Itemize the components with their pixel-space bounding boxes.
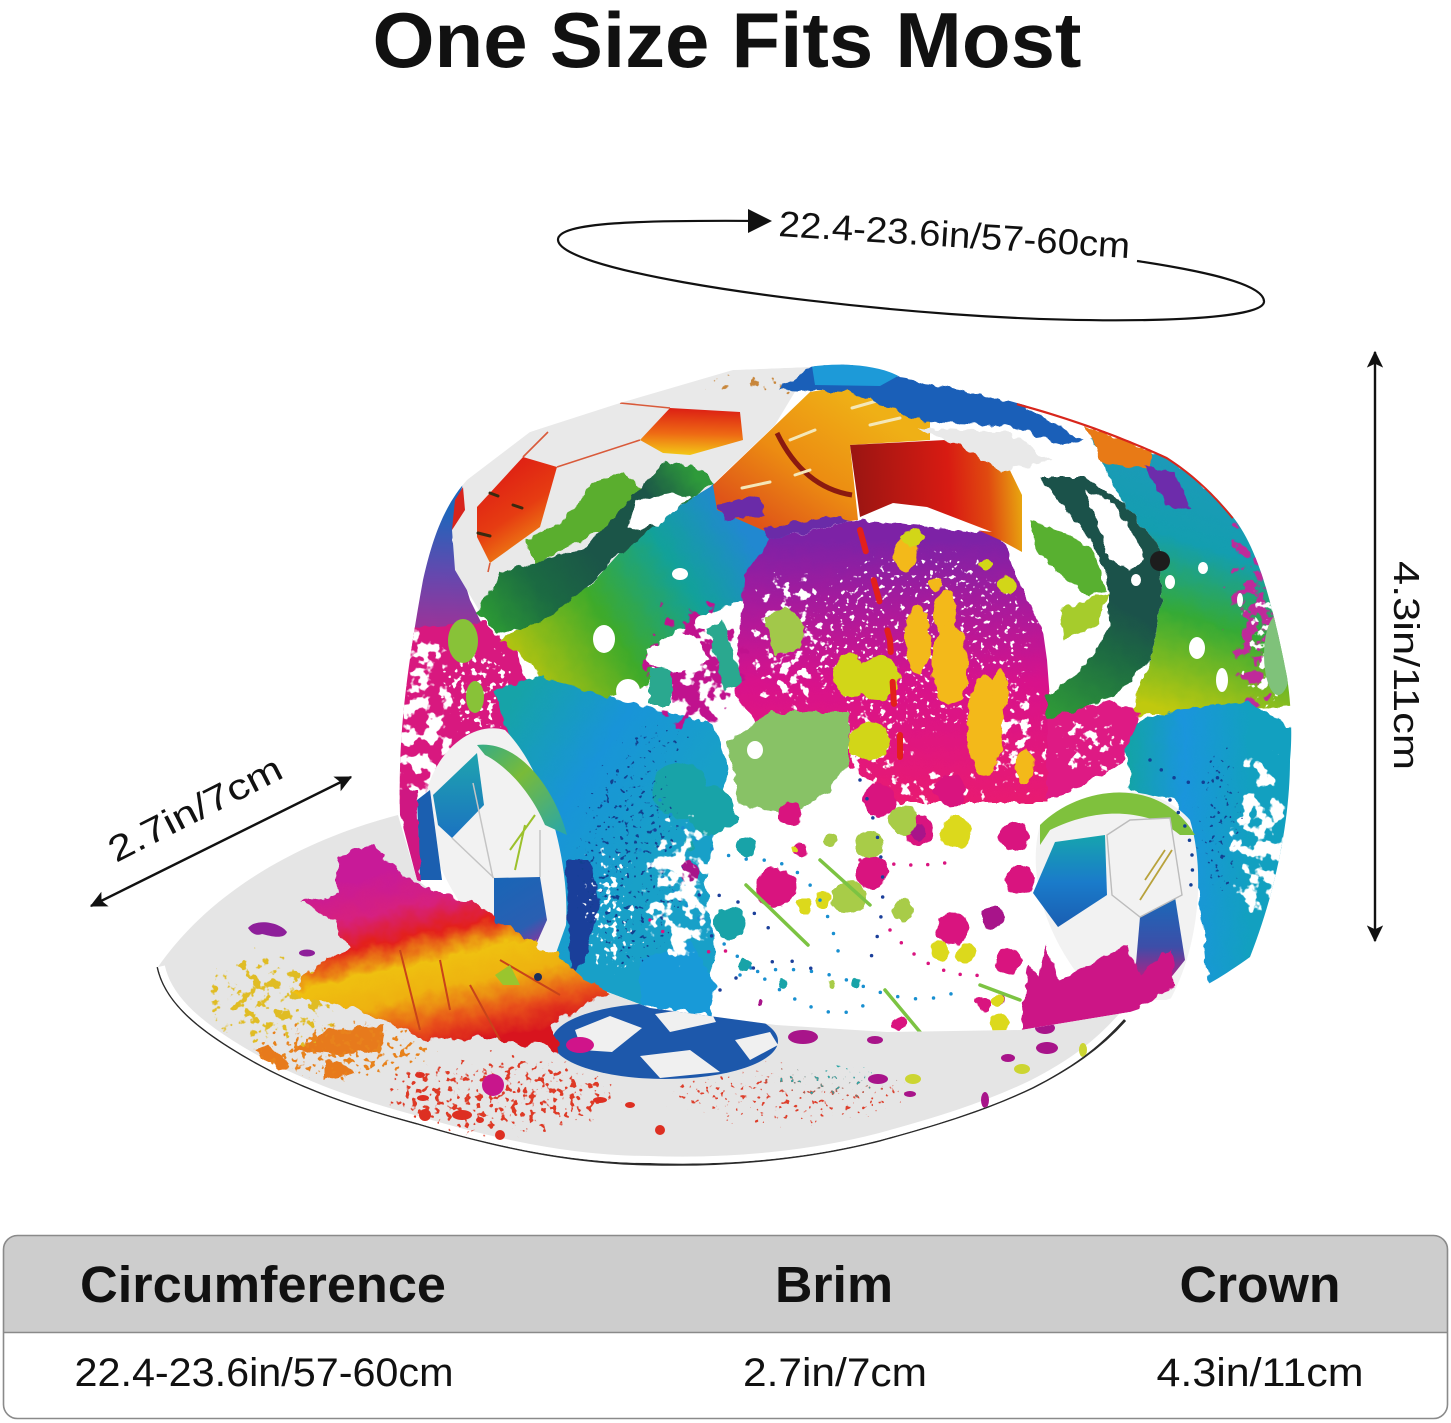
table value row: 4.3in/11cm	[1156, 1351, 1364, 1395]
magenta splash on the right ball	[1021, 945, 1175, 1030]
dark green swoosh	[477, 460, 713, 633]
brim orange spray	[250, 1015, 440, 1085]
crown of the hat with paint splatter	[384, 350, 1300, 1050]
blue patch at the bottom centre	[640, 940, 715, 1015]
navy and white speckle on the left blue	[568, 745, 692, 975]
blue band across the top	[780, 365, 1085, 445]
lower centre splatter blobs: purple	[677, 823, 1006, 1006]
lime blob in the speckled area	[765, 605, 805, 655]
circumference measurement: ellipse arrow and label: 22.4-23.6in/57-60cm	[777, 203, 1131, 266]
top edge streaks	[705, 374, 790, 394]
yellow spray	[200, 950, 350, 1050]
dark green crescent	[1040, 477, 1163, 717]
brim length measurement: arrow and label: 2.7in/7cm	[101, 747, 289, 870]
orange patch at top right	[1085, 425, 1150, 470]
right soccer ball	[1033, 792, 1198, 1000]
streaks on the orange panel	[742, 400, 900, 488]
magenta strip at the crown's left base	[399, 790, 420, 882]
table value row: 22.4-23.6in/57-60cm	[74, 1351, 453, 1395]
orange patches	[253, 1025, 385, 1080]
upper left soccer ball	[452, 367, 810, 612]
white paint splat near the green	[647, 632, 708, 672]
lower centre splatter blobs: yellow	[791, 817, 1010, 1035]
blue lower left splash	[495, 676, 728, 1005]
purple ring splat	[248, 922, 287, 937]
purple and green flecks under the orange	[718, 495, 850, 540]
left side panel: blue to purple	[411, 486, 481, 650]
hat illustration	[150, 350, 1300, 1180]
lower right blue splash	[1125, 702, 1295, 995]
lower centre splatter blobs: lime	[824, 805, 918, 989]
circumference measurement: ellipse arrow and label	[558, 203, 1264, 320]
table header row	[4, 1236, 1448, 1332]
rainbow field right of the crescent	[1090, 440, 1295, 716]
left side magenta field	[392, 622, 530, 815]
central green to blue splash	[500, 482, 790, 715]
lower centre splatter blobs: magenta	[756, 774, 1035, 1030]
dark red curve	[777, 433, 852, 495]
table value row: 2.7in/7cm	[743, 1351, 927, 1395]
table header row: Circumference	[80, 1256, 446, 1313]
lime streaks	[746, 860, 1020, 1050]
green splash on the ball	[525, 470, 640, 565]
right edge speckle	[1230, 490, 1294, 720]
table header row: Brim	[775, 1256, 893, 1313]
red arc panel	[850, 440, 1022, 552]
green paint blobs on the left	[448, 619, 478, 663]
right white panel with green splat	[1043, 633, 1052, 692]
table header row: Crown	[1180, 1256, 1340, 1313]
brim rainbow splash	[290, 845, 610, 1050]
white splat on the crescent	[1085, 490, 1145, 570]
yellow-lime blobs in magenta	[833, 531, 1016, 762]
hat eyelet	[1150, 551, 1170, 571]
lower centre splatter blobs: teal	[652, 762, 861, 988]
red drips in magenta	[860, 530, 900, 775]
small flecks to the right	[650, 1057, 930, 1133]
table value row	[74, 1351, 1364, 1395]
orange panel at the top centre	[713, 385, 930, 532]
yellow-orange paint dribbles	[893, 538, 1033, 783]
red line along the top right seam	[1017, 404, 1233, 518]
crown height measurement: arrow and label: 4.3in/11cm	[1386, 561, 1427, 770]
white paint spots on the colour	[593, 562, 1243, 759]
sage green blob	[727, 712, 850, 815]
speckled magenta left of the centre	[640, 603, 750, 733]
dark navy splatter beside the left ball	[566, 860, 600, 975]
red spray	[375, 1053, 625, 1137]
brim of the hat	[150, 800, 1150, 1180]
red flecks	[415, 1072, 665, 1140]
magenta and purple dots at right of brim	[788, 1022, 1058, 1108]
fine speck trails in the lower centre	[640, 800, 960, 1013]
size table	[4, 1236, 1448, 1418]
white mottling over the magenta	[748, 540, 1053, 812]
teal streaks	[650, 620, 742, 705]
brim length measurement: arrow and label	[91, 747, 351, 906]
speckled dots on the blue	[1150, 760, 1230, 890]
magenta strip under the crescent	[1047, 700, 1140, 800]
central magenta field	[735, 520, 1050, 803]
brim soccer ball	[552, 1003, 778, 1079]
left soccer ball	[417, 728, 567, 970]
